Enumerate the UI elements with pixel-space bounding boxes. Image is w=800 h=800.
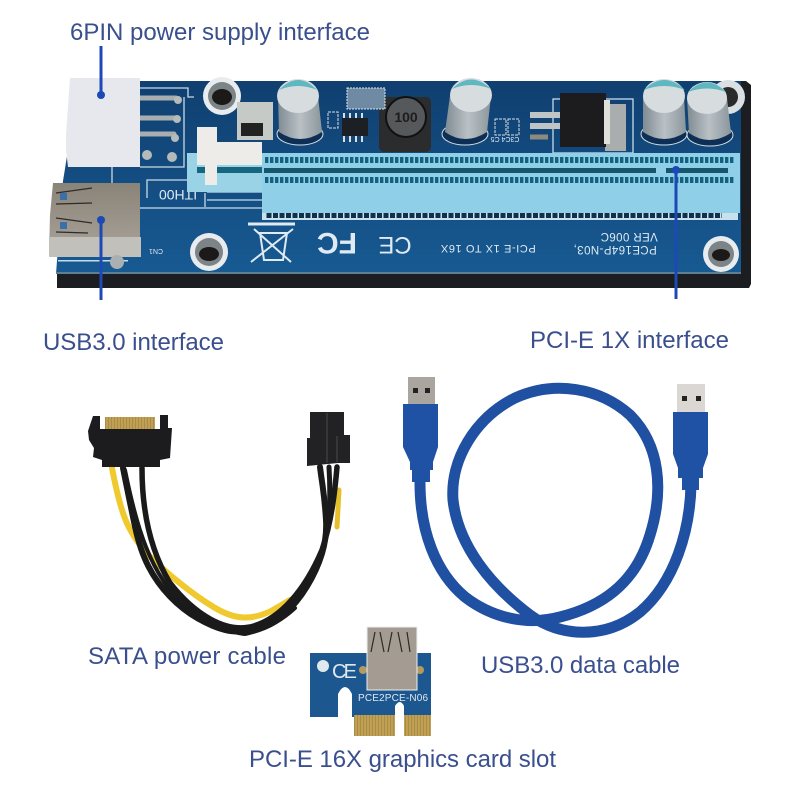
SATA power cable <box>88 412 350 634</box>
voltage regulator <box>530 93 633 153</box>
mounting hole bottom left <box>190 233 228 271</box>
cable loop <box>420 388 691 632</box>
wires <box>112 467 339 634</box>
CE mark: CE <box>378 231 412 258</box>
CE mark: CE <box>332 661 357 683</box>
slot extension left <box>187 153 265 192</box>
silk label CN1: CN1 <box>149 247 163 254</box>
label: SATA power cable: SATA power cable <box>88 643 286 670</box>
mounting hole top right <box>711 80 745 114</box>
adapter card <box>310 627 431 736</box>
inductor 100: 100 <box>394 109 418 125</box>
silk resistor block <box>347 88 385 109</box>
silk label C3C4 C5: C3C4 C5 <box>491 135 519 142</box>
6-pin white connector <box>66 78 140 167</box>
mounting hole top left <box>203 77 241 115</box>
FCC mark: FC <box>317 226 357 259</box>
white latch <box>197 127 262 185</box>
riser board <box>49 77 751 288</box>
label: PCI-E 1X interface: PCI-E 1X interface <box>530 327 729 354</box>
callout: USB3.0 <box>97 216 105 300</box>
label: USB3.0 interface: USB3.0 interface <box>43 329 224 356</box>
silk text version: VER 006C <box>600 230 658 242</box>
silk label ITH00: ITH00 <box>159 187 197 203</box>
label: USB3.0 data cable: USB3.0 data cable <box>481 652 680 679</box>
capacitor 1 <box>277 79 323 145</box>
chip <box>328 112 368 142</box>
label: PCI-E 16X: PCI-E 16X graphics card slot <box>249 746 556 773</box>
callout: 6PIN power supply <box>97 46 105 99</box>
solder dots <box>359 666 424 674</box>
left USB plug <box>403 377 438 482</box>
silk text model: PCE164P-N03, <box>573 243 657 255</box>
silk component outlines <box>495 119 519 135</box>
recycle-bin mark <box>248 224 295 262</box>
card PCB <box>310 653 431 717</box>
SATA connector <box>88 415 172 467</box>
USB socket <box>367 627 417 690</box>
label: 6PIN: 6PIN power supply interface <box>70 19 370 46</box>
capacitor 4 <box>687 82 733 146</box>
card label: PCE2PCE-N06 <box>358 693 428 704</box>
capacitor 3 <box>641 79 687 145</box>
capacitor 2 <box>442 78 492 145</box>
6-pin connector pins <box>140 96 182 162</box>
transistor small <box>237 102 273 140</box>
mounting hole bottom right <box>703 236 739 272</box>
PCI-E slot <box>262 153 740 220</box>
callout: PCI-E 1X <box>672 166 680 299</box>
silkscreen outline <box>112 88 263 208</box>
silk text PCI-E 1X TO 16X: PCI-E 1X TO 16X <box>440 242 536 254</box>
right USB plug <box>673 384 708 490</box>
USB3.0 data cable <box>403 377 708 632</box>
USB 3.0 socket <box>49 183 141 269</box>
inductor 100 <box>379 97 431 152</box>
6-pin plug <box>307 412 350 466</box>
board black edge <box>57 81 751 288</box>
board blue PCB <box>56 81 741 274</box>
gold fingers <box>354 715 431 736</box>
